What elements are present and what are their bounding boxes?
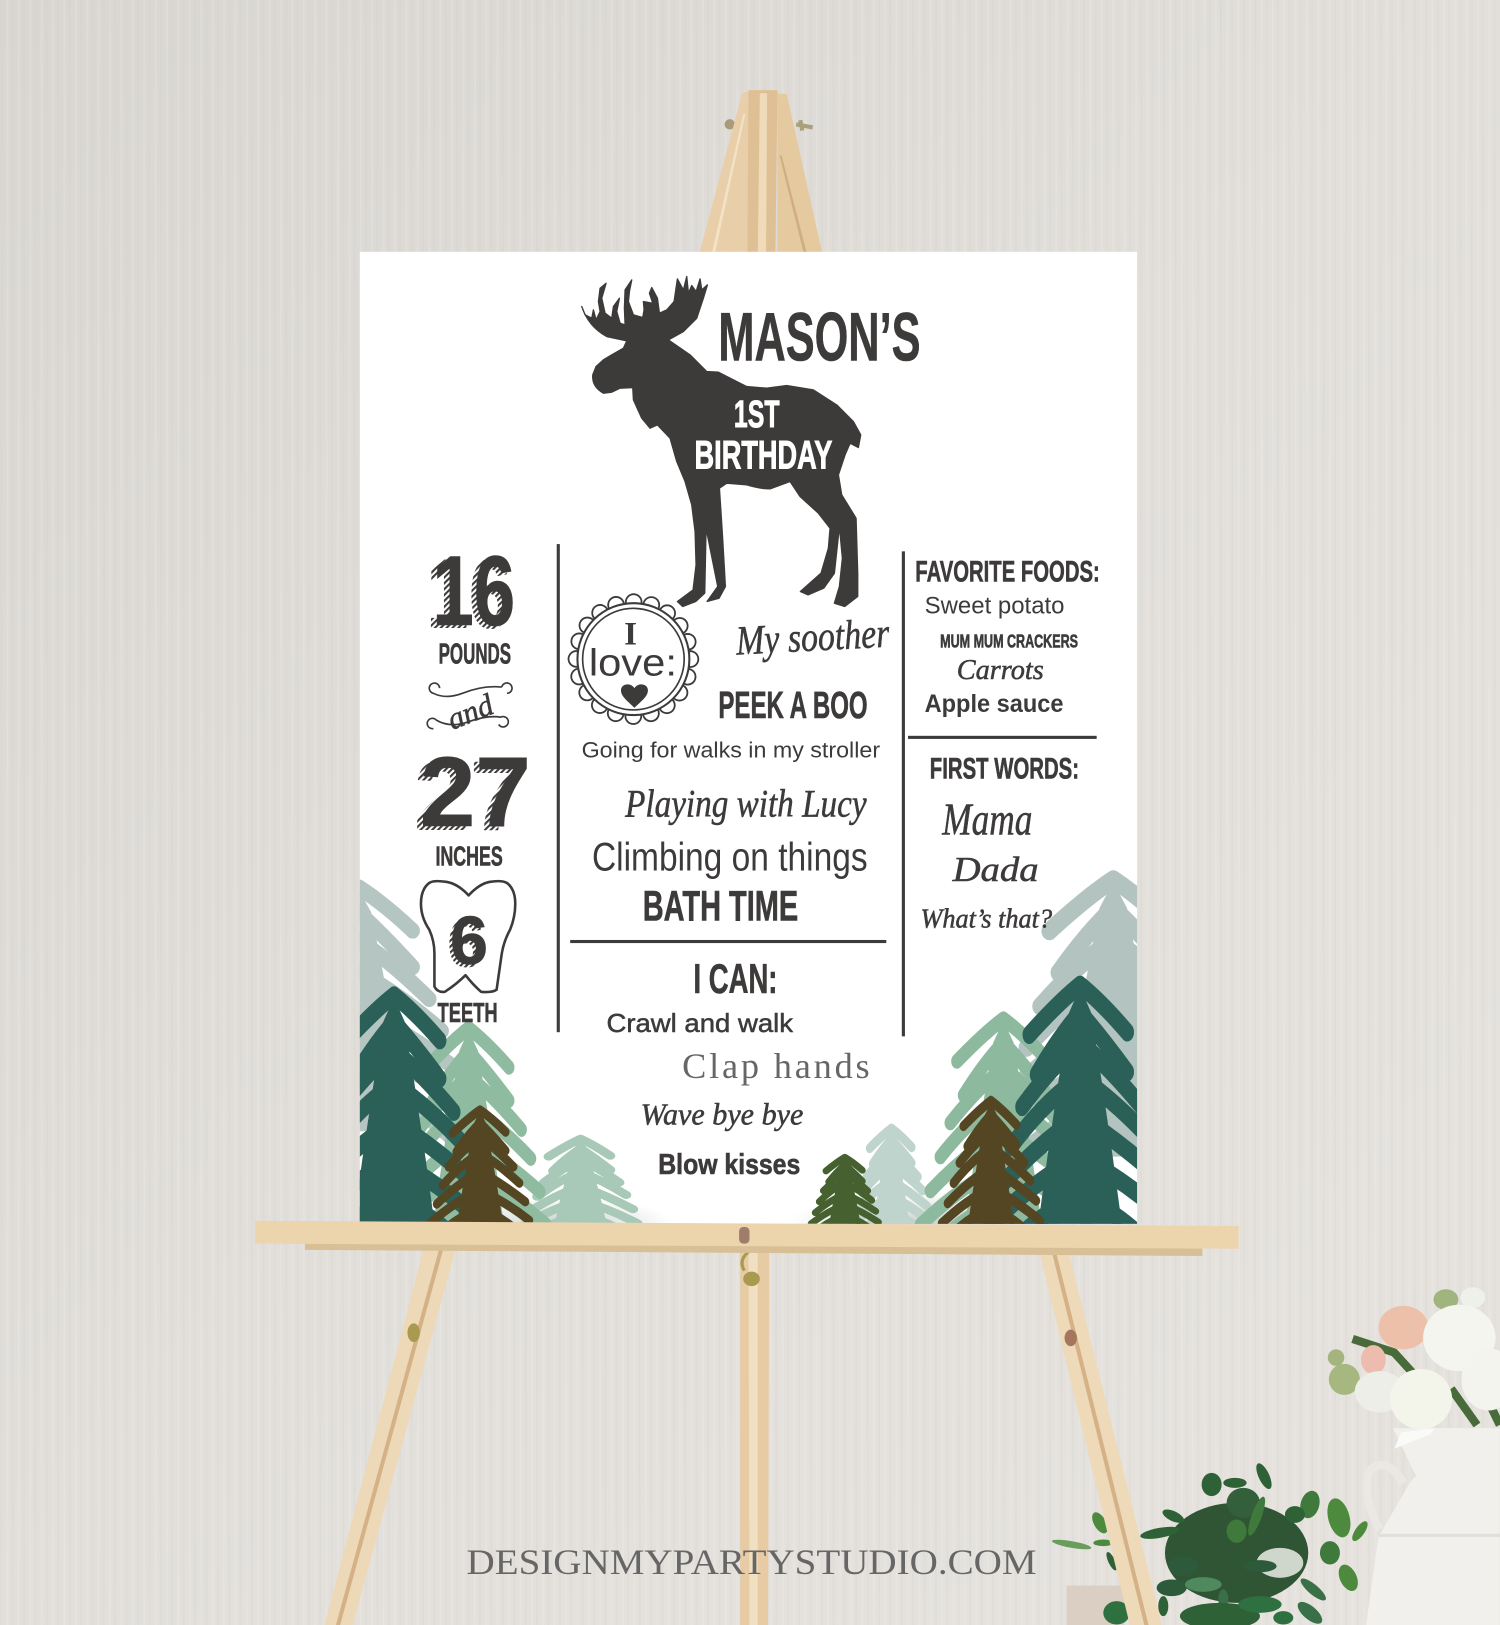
tree: brown left: [431, 1110, 529, 1239]
badge: I love: [576, 602, 690, 716]
badge: I love: love:: [589, 642, 677, 685]
list: first words: FIRST WORDS:: [930, 752, 1079, 785]
stat: 27 inches: 27: [414, 741, 526, 852]
list: I love items: PEEK A BOO: [718, 684, 868, 727]
tree: light green left: [420, 1022, 552, 1222]
tree: pale grey green right: [853, 1129, 930, 1238]
list: I can: I CAN:: [694, 955, 777, 1002]
poster board: [360, 252, 1137, 1224]
list: I love items: Going for walks in my stroller: [582, 738, 880, 763]
list: I can: Crawl and walk: [606, 1010, 793, 1038]
list: I love items: Climbing on things: [592, 836, 868, 880]
decorative word: and: [427, 683, 512, 737]
list: I can: [606, 955, 870, 1181]
decorative word: and: and: [442, 687, 499, 737]
list: favorite foods: MUM MUM CRACKERS: [940, 631, 1078, 652]
tree: grey right: [1018, 870, 1138, 1157]
tree: light green right: [920, 1019, 1086, 1255]
title: 1st birthday: [695, 393, 832, 477]
list: favorite foods: Carrots: [957, 654, 1044, 686]
list: I can: Clap hands: [682, 1046, 870, 1086]
icon: heart: [621, 684, 648, 708]
pitcher: [1366, 1428, 1500, 1625]
title: Mason's: MASON’S: [718, 300, 920, 376]
badge: I love: I: [624, 616, 637, 653]
tree: dark teal right: [983, 976, 1138, 1224]
list: first words: [920, 752, 1079, 934]
easel ledge: [255, 1221, 1239, 1256]
tree: olive small: [811, 1157, 879, 1233]
easel top: [700, 90, 822, 252]
stat: 6 teeth with tooth icon: [421, 881, 515, 1028]
list: favorite foods: FAVORITE FOODS:: [915, 555, 1100, 588]
list: I can: Blow kisses: [658, 1149, 800, 1181]
list: first words: Dada: [952, 850, 1039, 889]
title: 1st birthday: BIRTHDAY: [695, 433, 832, 477]
easel legs: [325, 1244, 1162, 1625]
list: first words: Mama: [941, 793, 1032, 844]
list: I love items: BATH TIME: [643, 883, 798, 930]
list: first words: What’s that?: [920, 904, 1053, 934]
stat: 16 pounds: 16: [432, 536, 515, 647]
tree: grey left: [360, 880, 454, 1142]
list: favorite foods: [915, 555, 1100, 718]
list: I can: Wave bye bye: [641, 1096, 804, 1131]
divider lines: [557, 544, 1097, 1036]
stat: 16 pounds: [426, 536, 515, 670]
box behind plant: [1067, 1586, 1125, 1625]
flowers: [1328, 1287, 1500, 1429]
tree: pale green small: [524, 1139, 638, 1238]
stat: 6 teeth with tooth icon: TEETH: [438, 997, 498, 1028]
list: favorite foods: Sweet potato: [925, 593, 1065, 620]
plant: [1051, 1461, 1370, 1625]
list: I love items: My soother: [734, 610, 891, 664]
tree: dark teal left: [360, 986, 469, 1222]
tree: brown right: [942, 1101, 1040, 1241]
moose silhouette: [582, 277, 861, 607]
pine trees: [255, 879, 1227, 1261]
stat: 6 teeth with tooth icon: 6: [450, 903, 488, 979]
watermark: DESIGNMYPARTYSTUDIO.COM: [467, 1542, 1037, 1582]
stat: 16 pounds: POUNDS: [439, 638, 511, 670]
list: I love items: [582, 610, 891, 930]
stat: 6 teeth with tooth icon: 6: [447, 906, 485, 982]
stat: 27 inches: INCHES: [435, 840, 503, 871]
title: 1st birthday: 1ST: [734, 393, 780, 436]
list: I love items: Playing with Lucy: [624, 782, 867, 826]
list: favorite foods: Apple sauce: [925, 690, 1063, 718]
stat: 16 pounds: 16: [426, 539, 511, 650]
stat: 27 inches: 27: [420, 737, 531, 848]
